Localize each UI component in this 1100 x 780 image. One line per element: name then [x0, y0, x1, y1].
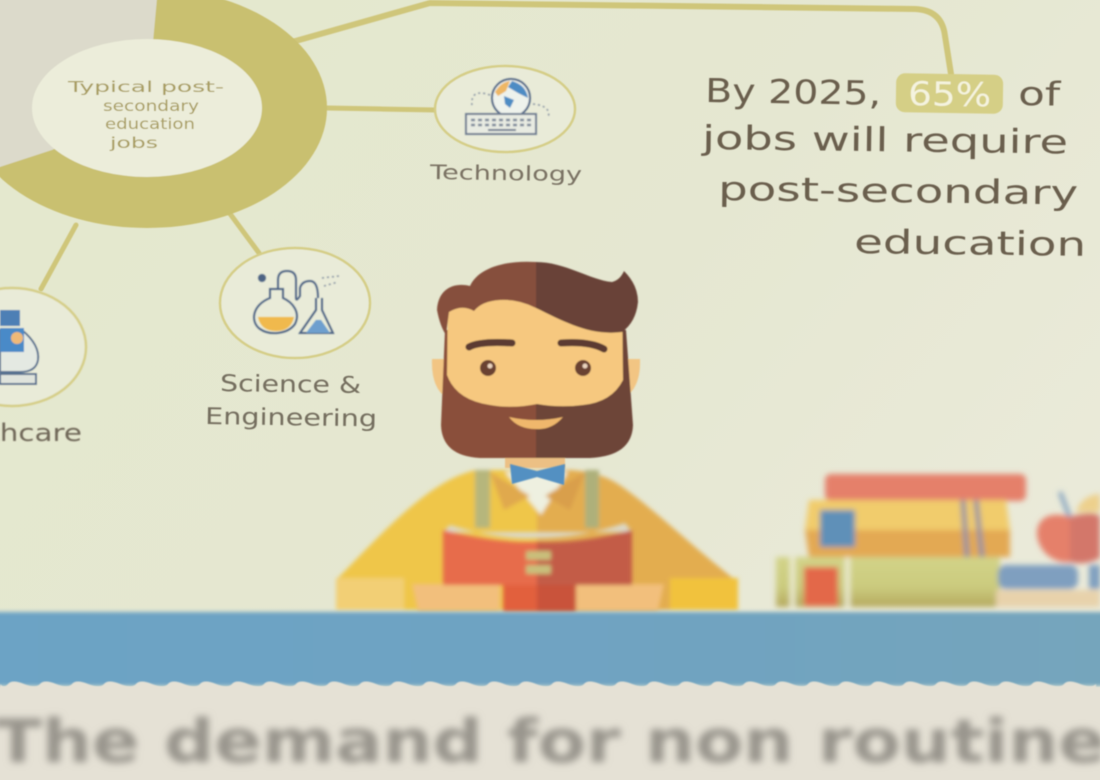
eyebrows: [469, 342, 512, 347]
ears: [432, 359, 640, 396]
headline: 65% of jobs: of: [1018, 74, 1062, 114]
icon: flasks: [254, 271, 339, 333]
small blue book: [998, 565, 1078, 589]
bottom panel with blurred headline: [0, 682, 1100, 780]
donut grey segment: [0, 0, 158, 180]
open red book and hands: [412, 523, 664, 612]
donut centre label: Typical post-: [66, 78, 224, 96]
icon: microscope: [0, 310, 38, 384]
eyes: [480, 360, 496, 376]
donut centre label: [66, 78, 224, 152]
top red book: [825, 474, 1026, 501]
node: Healthcare: [0, 288, 86, 447]
beard: [441, 330, 536, 458]
label: Science & Engineering: Science &: [220, 371, 361, 399]
neck: [505, 450, 565, 468]
label: Science & Engineering: [205, 371, 377, 432]
stack of books and apple: [776, 474, 1100, 607]
hair: [437, 262, 536, 335]
green book: [776, 557, 1000, 607]
donut centre label: jobs: [108, 134, 158, 152]
donut chart: typical post-secondary jobs: [0, 0, 327, 228]
blue desk: [0, 612, 1100, 686]
bow tie: [510, 464, 565, 485]
headline: 65% of jobs: [700, 71, 1086, 264]
highlight pill: [896, 73, 1003, 114]
apple: [1060, 492, 1070, 518]
headline: 65% of jobs: 65%: [908, 74, 991, 114]
label: Technology: Technology: [429, 160, 582, 186]
yellow book: [805, 500, 1010, 530]
scalloped edge: [0, 682, 1096, 694]
character: bearded man reading: [336, 262, 738, 612]
headline: 65% of jobs: jobs will require: [700, 118, 1068, 161]
beige book: [996, 590, 1100, 607]
label: Science & Engineering: Engineering: [205, 404, 377, 432]
donut centre label: education: [105, 115, 195, 133]
headline: 65% of jobs: post-secondary: [718, 169, 1078, 212]
panel background: [0, 687, 1100, 780]
head: [432, 262, 640, 468]
blurred headline: The demand for non routine: [0, 707, 1100, 777]
headline: 65% of jobs: education: [854, 222, 1086, 264]
icon: globe and keyboard: [466, 79, 549, 134]
face: [447, 292, 623, 407]
donut centre label: secondary: [103, 97, 199, 115]
smile: [509, 417, 563, 429]
headline: 65% of jobs: By 2025,: [705, 71, 881, 113]
node: Science & Engineering: [205, 248, 377, 432]
node: Technology: [429, 66, 582, 186]
body and jacket: [336, 470, 738, 610]
connector lines: [41, 3, 951, 289]
